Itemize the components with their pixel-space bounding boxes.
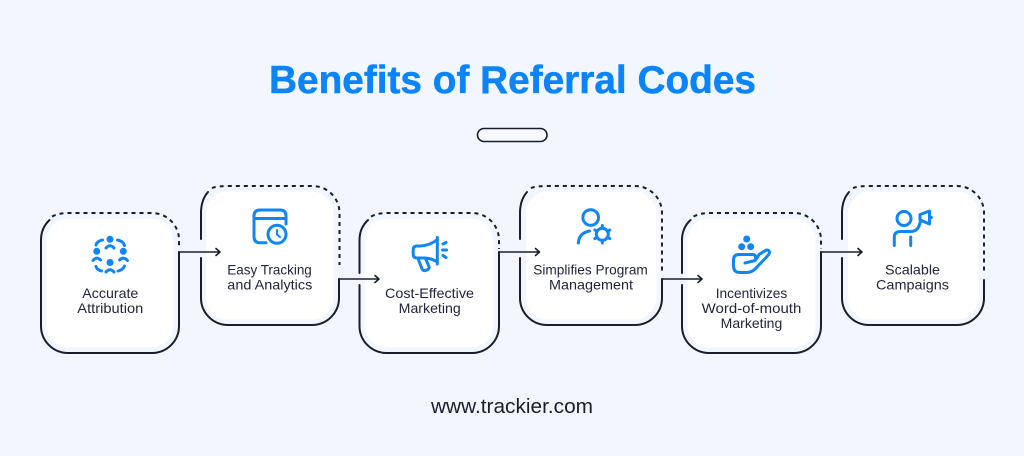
panel: incentivizes word-of-mouth marketing bbox=[682, 213, 821, 353]
panel: accurate attribution bbox=[41, 213, 179, 353]
arrow: card 5 to card 6 bbox=[821, 248, 862, 256]
icon: megaphone bbox=[413, 238, 446, 271]
panel: cost-effective marketing bbox=[360, 213, 499, 353]
label: Cost-Effective bbox=[385, 285, 474, 301]
arrow: card 1 to card 2 bbox=[179, 248, 220, 256]
label: Campaigns bbox=[876, 276, 949, 292]
label bbox=[227, 262, 312, 292]
arrow: card 2 to card 3 bbox=[339, 276, 379, 282]
icon: calendar with clock bbox=[254, 210, 286, 243]
icon: people network bbox=[93, 236, 128, 272]
arrow: card 3 to card 4 bbox=[499, 248, 540, 256]
label: Marketing bbox=[399, 300, 461, 316]
label bbox=[876, 262, 949, 292]
label: Accurate bbox=[82, 285, 139, 301]
label bbox=[533, 262, 648, 292]
label: Scalable bbox=[885, 262, 940, 278]
icon: person with megaphone bbox=[894, 211, 932, 246]
label: Word-of-mouth bbox=[702, 300, 801, 316]
label bbox=[77, 285, 143, 316]
label: Simplifies Program bbox=[533, 262, 648, 278]
label: Attribution bbox=[77, 300, 143, 316]
icon: person with gear bbox=[578, 210, 610, 243]
label: Easy Tracking bbox=[227, 262, 312, 278]
label: Marketing bbox=[721, 315, 782, 331]
label: and Analytics bbox=[227, 276, 312, 292]
arrow: card 4 to card 5 bbox=[662, 276, 702, 282]
icon: hand with coins bbox=[734, 236, 770, 272]
title: Benefits of Referral Codes bbox=[269, 59, 756, 102]
label: Management bbox=[549, 276, 633, 292]
label bbox=[385, 285, 474, 316]
panel: simplifies program management bbox=[520, 186, 662, 325]
panel: easy tracking and analytics bbox=[201, 186, 340, 325]
panel: scalable campaigns bbox=[842, 186, 984, 325]
website url: www.trackier.com bbox=[430, 396, 593, 418]
label: Incentivizes bbox=[716, 285, 787, 301]
title pill ornament bbox=[478, 128, 547, 142]
label bbox=[702, 285, 801, 331]
